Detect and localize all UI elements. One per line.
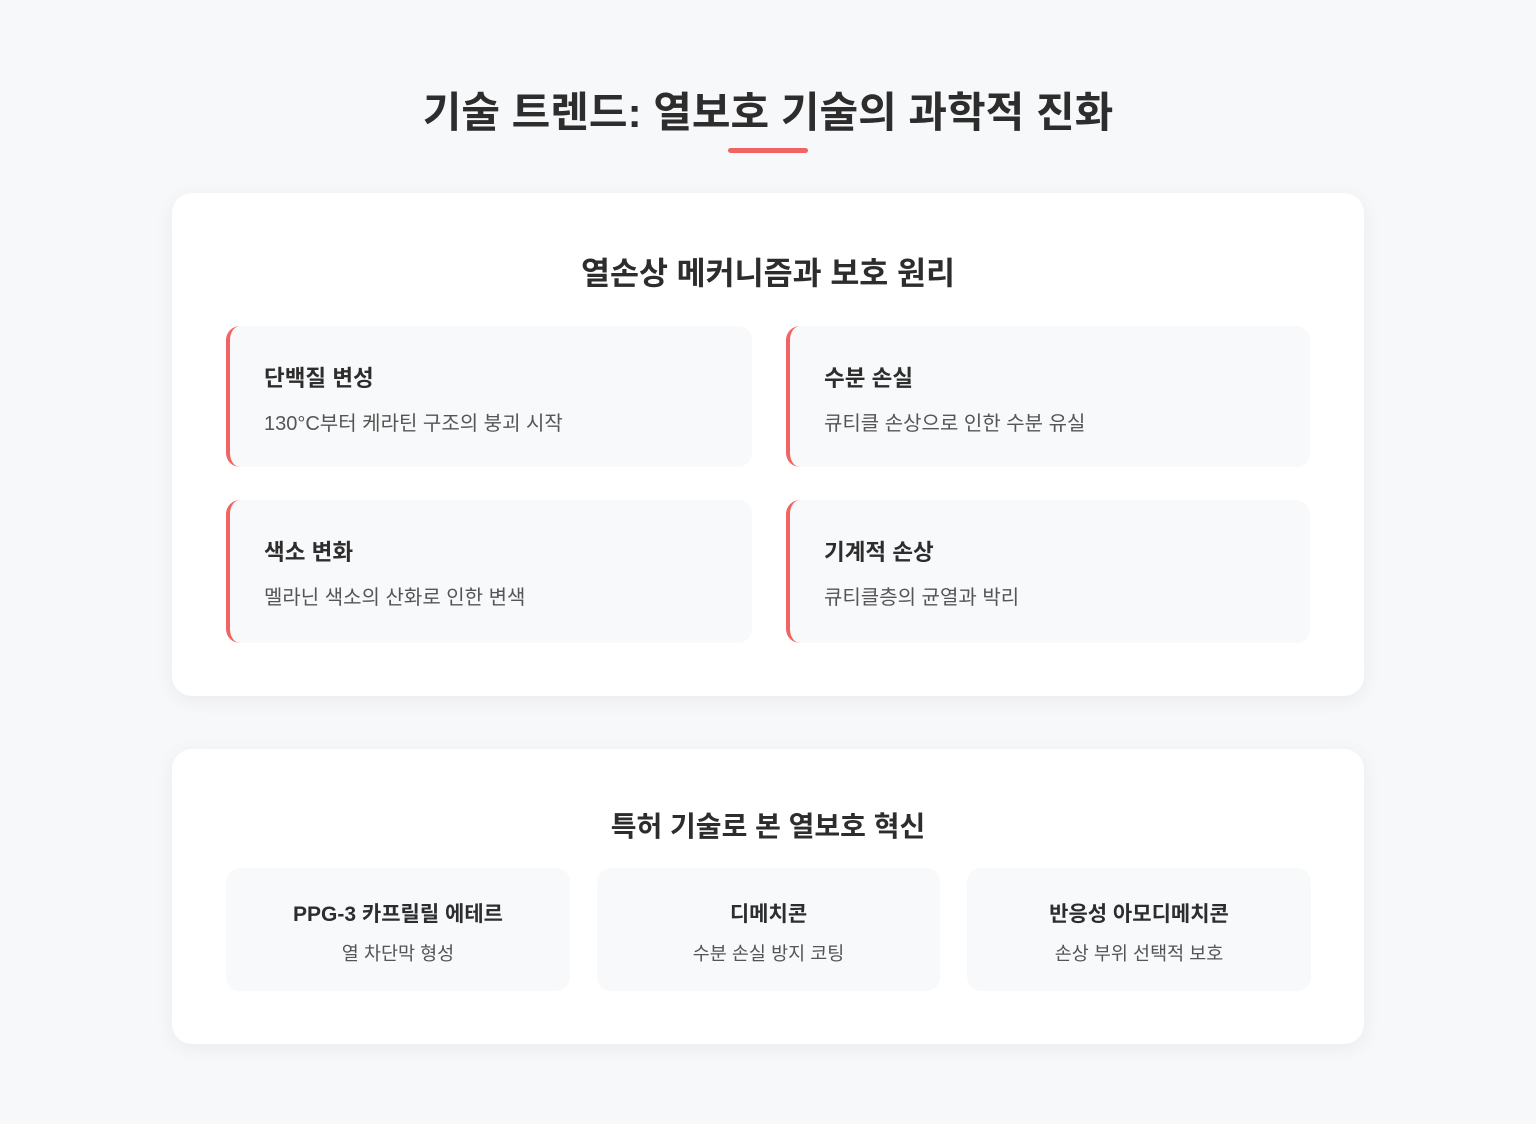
item: moisture loss: 큐티클 손상으로 인한 수분 유실 [824, 413, 1085, 435]
item: mechanical damage: 기계적 손상 [824, 540, 934, 565]
title underline [728, 148, 808, 153]
item: protein denaturation [226, 326, 752, 467]
box: reactive amodimethicone: 손상 부위 선택적 보호 [1055, 943, 1223, 964]
title: 기술 트렌드: 열보호 기술의 과학적 진화 [423, 89, 1113, 136]
item: moisture loss: 수분 손실 [824, 366, 913, 391]
item: protein denaturation: 130°C부터 케라틴 구조의 붕괴 시작 [264, 413, 563, 435]
panel: heat damage mechanisms [172, 193, 1364, 696]
box: PPG-3: 열 차단막 형성 [342, 943, 454, 964]
box: PPG-3 [226, 868, 570, 991]
item: protein denaturation: 단백질 변성 [264, 366, 374, 391]
box: reactive amodimethicone: 반응성 아모디메치콘 [1049, 903, 1229, 926]
item: pigment change [226, 500, 752, 643]
panel heading: 특허 기술로 본 열보호 혁신 [611, 811, 925, 842]
panel: patent technologies [172, 749, 1364, 1044]
box: dimethicone: 수분 손실 방지 코팅 [693, 943, 844, 964]
item: moisture loss [786, 326, 1310, 467]
box: reactive amodimethicone [967, 868, 1311, 991]
item: pigment change: 색소 변화 [264, 540, 353, 565]
panel heading: 열손상 메커니즘과 보호 원리 [581, 255, 955, 291]
box: PPG-3: PPG-3 카프릴릴 에테르 [293, 903, 503, 926]
item: pigment change: 멜라닌 색소의 산화로 인한 변색 [264, 587, 525, 609]
box: dimethicone [597, 868, 940, 991]
item: mechanical damage: 큐티클층의 균열과 박리 [824, 587, 1019, 609]
item: mechanical damage [786, 500, 1310, 643]
box: dimethicone: 디메치콘 [730, 903, 807, 926]
